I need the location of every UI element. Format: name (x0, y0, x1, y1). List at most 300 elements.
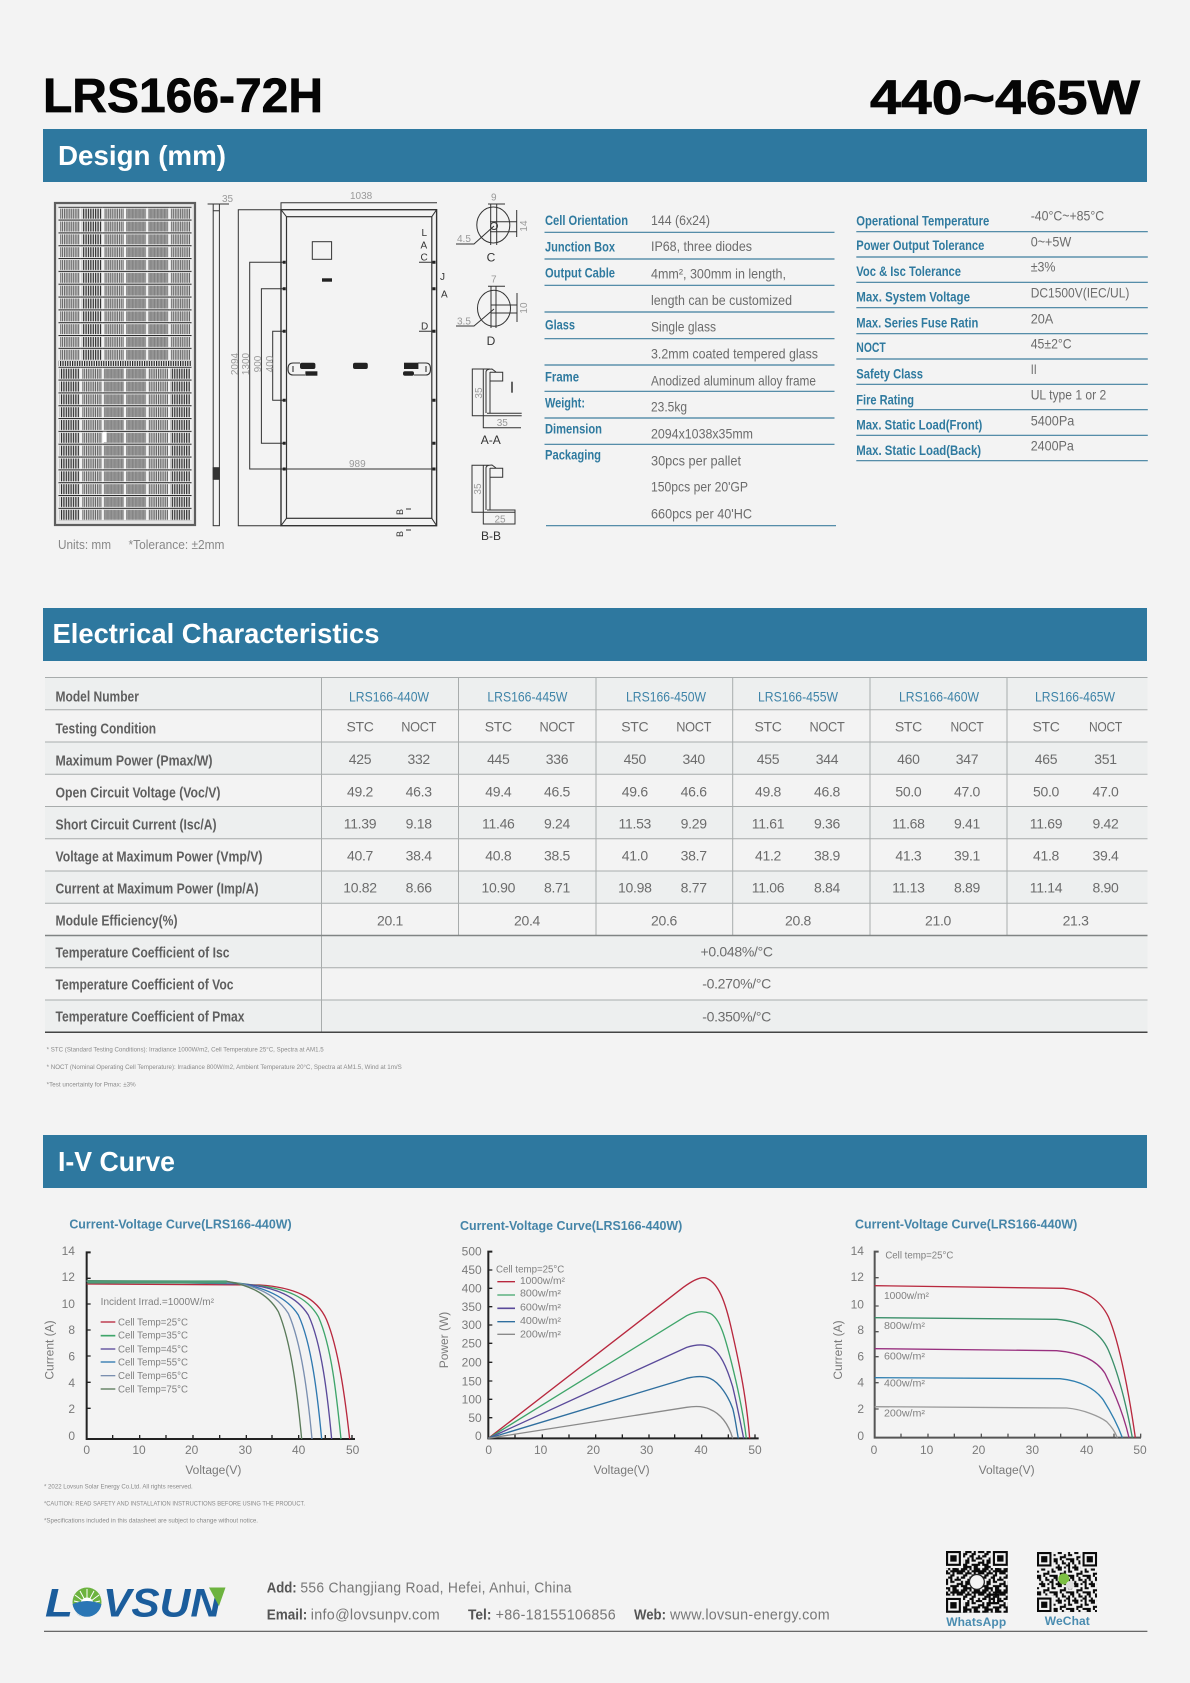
row: short circuit current: 9.24 (544, 816, 571, 832)
row: voltage at maximum power: 41.0 (622, 848, 648, 864)
row: maximum power: 445 (487, 751, 510, 767)
row: temperature coefficient of Isc: +0.048%/°C (700, 944, 773, 960)
row: open circuit voltage: 49.6 (622, 784, 648, 800)
spec table: operating ratings: Fire Rating (856, 391, 914, 407)
QR code: WeChat (1037, 1552, 1097, 1628)
row: voltage at maximum power: 38.4 (406, 848, 432, 864)
axes and ticks: 10 (920, 1443, 934, 1457)
axes and ticks: 0 (475, 1429, 482, 1443)
row: short circuit current: 9.41 (954, 816, 981, 832)
legend: 1000w/m² (520, 1276, 566, 1287)
row: temperature coefficient of Isc: Temperature Coefficient of Isc (56, 946, 230, 962)
axes and ticks: 450 (462, 1263, 482, 1277)
footnotes: legal notices: *Specifications included in this datasheet are subject to change without notice. (44, 1519, 258, 1525)
row: open circuit voltage: 46.6 (681, 784, 707, 800)
section header: electrical characteristics: Electrical Characteristics (52, 618, 380, 649)
detail: section D: 3.5 (457, 316, 471, 327)
row: current at maximum power: 8.89 (954, 880, 981, 896)
legend: 800w/m² (884, 1321, 926, 1332)
axes and ticks: 30 (640, 1443, 654, 1457)
axes and ticks: 8 (857, 1323, 864, 1337)
footnotes: legal notices: *CAUTION: READ SAFETY AND INSTALLATION INSTRUCTIONS BEFORE USING THE PRODUCT. (44, 1502, 305, 1508)
detail: section C: 14 (519, 220, 530, 232)
note: units and tolerance: Units: mm (58, 537, 111, 552)
dimension labels (230, 191, 448, 537)
axes and ticks: 150 (462, 1374, 482, 1388)
detail: section C (456, 193, 530, 265)
detail: section B-B: 35 (473, 483, 484, 495)
row: module efficiency: 21.3 (1063, 913, 1089, 929)
axes and ticks: 20 (587, 1443, 600, 1457)
axes and ticks: 300 (462, 1318, 482, 1332)
row: open circuit voltage: 50.0 (1033, 784, 1060, 800)
row: temperature coefficient of Isc (56, 944, 773, 962)
spec table: module construction: 3.2mm coated tempered glass (651, 345, 818, 361)
spec table: operating ratings: Max. Static Load(Back) (856, 442, 981, 458)
axes and ticks: 2 (68, 1402, 75, 1416)
dimension labels: C (420, 253, 428, 264)
spec table: module construction: Cell Orientation (545, 212, 628, 228)
icon: sun emblem (72, 1586, 102, 1618)
spec table: module construction: Glass (545, 316, 575, 332)
row: testing condition: NOCT (401, 719, 437, 735)
row: temperature coefficient of Pmax (56, 1009, 771, 1026)
legend: Cell Temp=55°C (118, 1357, 188, 1368)
row: open circuit voltage: 47.0 (1092, 784, 1119, 800)
axes and ticks: 20 (972, 1443, 986, 1457)
legend: Cell temp=25°C (885, 1251, 953, 1262)
dimension labels: 400 (265, 355, 276, 372)
contact details: info@lovsunpv.com (311, 1606, 440, 1623)
QR code: WhatsApp: WhatsApp (946, 1615, 1006, 1629)
row: model number: LRS166-460W (899, 689, 980, 705)
curves (875, 1286, 1135, 1438)
row: module efficiency: 20.4 (514, 913, 541, 929)
dimension labels: A (420, 240, 428, 251)
axes and ticks: 12 (62, 1270, 75, 1284)
spec table: operating ratings: 0~+5W (1031, 234, 1072, 250)
axes and ticks: 50 (468, 1411, 482, 1425)
legend: 600w/m² (884, 1351, 926, 1362)
row: testing condition: NOCT (1089, 719, 1123, 735)
note: units and tolerance (58, 537, 224, 552)
axes and ticks: 50 (346, 1443, 360, 1457)
section header: I-V curve (43, 1135, 1147, 1188)
spec table: operating ratings: 20A (1031, 310, 1054, 326)
spec table: module construction: Anodized aluminum alloy frame (651, 372, 816, 388)
axes and ticks (42, 1244, 360, 1477)
spec table: operating ratings: Max. Static Load(Front) (856, 416, 982, 432)
spec table: module construction: Weight: (545, 394, 585, 410)
row: current at maximum power: 10.82 (343, 880, 377, 896)
row: model number: LRS166-465W (1035, 689, 1116, 705)
section header: design: Design (mm) (58, 140, 226, 171)
legend (496, 1265, 566, 1340)
row: testing condition: STC (346, 719, 374, 735)
row: open circuit voltage: 46.5 (544, 784, 571, 800)
row: open circuit voltage: 49.4 (485, 784, 512, 800)
row: current at maximum power: 11.14 (1030, 880, 1063, 896)
row: module efficiency: 20.8 (785, 913, 812, 929)
axes and ticks: 0 (871, 1443, 878, 1457)
section header: design (43, 129, 1147, 182)
contact details: +86-18155106856 (496, 1606, 616, 1623)
axes and ticks: 0 (857, 1429, 864, 1443)
panel: back view of module (230, 191, 448, 537)
spec table: operating ratings: Voc & Isc Tolerance (856, 263, 961, 279)
row: open circuit voltage (56, 784, 1119, 802)
legend: Cell Temp=75°C (118, 1384, 188, 1395)
row: open circuit voltage: 49.8 (755, 784, 782, 800)
row: voltage at maximum power: 39.4 (1092, 848, 1119, 864)
row: short circuit current: 9.42 (1092, 816, 1119, 832)
contact details: 556 Changjiang Road, Hefei, Anhui, China (300, 1579, 572, 1596)
axes and ticks: 0 (68, 1429, 75, 1443)
footnotes: test conditions: * STC (Standard Testing Conditions): Irradiance 1000W/m2, Cell Temperature 25°C, Spectra at AM1.5 (47, 1048, 324, 1054)
axes and ticks: 40 (694, 1443, 708, 1457)
contact details: Tel: (468, 1606, 491, 1623)
row: model number: LRS166-455W (758, 689, 839, 705)
detail: section B-B: B-B (481, 529, 501, 543)
row: maximum power: 344 (816, 751, 839, 767)
contact details: Email: (267, 1606, 307, 1623)
panel: front view of module (55, 203, 195, 525)
axes and ticks: 0 (485, 1443, 492, 1457)
contact details (267, 1579, 830, 1623)
detail: section C: 9 (491, 193, 497, 204)
dimension labels: 1300 (241, 352, 252, 375)
row: model number: LRS166-445W (487, 689, 568, 705)
axes and ticks: Voltage(V) (979, 1463, 1035, 1477)
axes and ticks: 0 (83, 1443, 90, 1457)
row: testing condition: NOCT (810, 719, 845, 735)
axes and ticks: 10 (62, 1297, 75, 1311)
spec table: module construction (544, 212, 836, 526)
logo: Lovsun: L (45, 1582, 73, 1626)
dimension labels: A (441, 289, 448, 300)
legend (101, 1297, 215, 1395)
spec table: module construction: Frame (545, 368, 579, 384)
row: temperature coefficient of Voc: -0.270%/°C (702, 975, 771, 991)
spec table: operating ratings: Power Output Tolerance (856, 237, 984, 253)
axes and ticks: 4 (857, 1376, 864, 1390)
dimension labels: B (395, 531, 405, 537)
row: testing condition: STC (1032, 719, 1060, 735)
spec table: module construction: Packaging (545, 446, 601, 462)
row: voltage at maximum power: 41.8 (1033, 848, 1060, 864)
row: maximum power: 460 (897, 751, 920, 767)
contact details: Web: (634, 1606, 666, 1623)
spec table: module construction: Junction Box (545, 238, 615, 254)
spec table: operating ratings: Safety Class (856, 365, 923, 381)
row: current at maximum power: 10.98 (618, 880, 652, 896)
row: current at maximum power: 8.90 (1092, 880, 1119, 896)
detail: section A-A: 35 (474, 387, 485, 399)
legend: 400w/m² (884, 1379, 926, 1390)
axes and ticks: 14 (62, 1244, 75, 1258)
spec table: module construction: Dimension (545, 420, 602, 436)
frame outline (281, 210, 437, 526)
axes and ticks: Voltage(V) (185, 1463, 241, 1477)
legend: 200w/m² (884, 1409, 926, 1420)
logo: Lovsun: O (72, 1582, 102, 1626)
row: short circuit current: 11.53 (619, 816, 652, 832)
row: testing condition: STC (895, 719, 922, 735)
axes and ticks: 350 (462, 1300, 482, 1314)
detail: section C: 4.5 (457, 234, 471, 245)
dimension labels: D (421, 321, 428, 332)
row: voltage at maximum power: 38.7 (681, 848, 707, 864)
row: maximum power: 340 (682, 751, 705, 767)
axes and ticks: 10 (534, 1443, 548, 1457)
row: maximum power: 351 (1094, 751, 1117, 767)
chart: power-voltage curve by irradiance (437, 1218, 762, 1477)
spec table: operating ratings: ±3% (1031, 258, 1056, 274)
dimension labels: 1038 (350, 191, 373, 202)
axes and ticks: 6 (857, 1350, 864, 1364)
footnotes: test conditions: *Test uncertainty for Pmax: ±3% (47, 1083, 136, 1089)
axes and ticks: 40 (1080, 1443, 1094, 1457)
contact details: Add: (267, 1579, 297, 1596)
spec table: module construction: Single glass (651, 319, 716, 335)
row: current at maximum power: 8.84 (814, 880, 841, 896)
axes and ticks: 20 (185, 1443, 199, 1457)
row: testing condition (56, 719, 1123, 737)
row: voltage at maximum power: 38.5 (544, 848, 571, 864)
contact details: www.lovsun-energy.com (669, 1606, 830, 1623)
logo: Lovsun: VSUN (103, 1582, 222, 1626)
row: maximum power: 450 (624, 751, 647, 767)
spec table: operating ratings: Max. Series Fuse Ratin (856, 314, 978, 330)
spec table: operating ratings: 5400Pa (1031, 412, 1074, 428)
legend: Incident Irrad.=1000W/m² (101, 1297, 215, 1308)
row: maximum power: 332 (407, 751, 430, 767)
dimension labels: J (440, 272, 445, 283)
QR code: WhatsApp (946, 1551, 1008, 1629)
spec table: operating ratings: -40°C~+85°C (1031, 208, 1104, 224)
row: current at maximum power: 10.90 (482, 880, 516, 896)
spec table: operating ratings: 2400Pa (1031, 437, 1074, 453)
row: testing condition: STC (621, 719, 649, 735)
axes and ticks: 10 (851, 1297, 864, 1311)
row: open circuit voltage: 49.2 (347, 784, 374, 800)
row: open circuit voltage: Open Circuit Voltage (Voc/V) (56, 786, 221, 802)
legend: Cell Temp=45°C (118, 1344, 188, 1355)
spec table: operating ratings: 45±2°C (1031, 335, 1072, 351)
chart: I-V curve by cell temperature: Current-Voltage Curve(LRS166-440W) (69, 1216, 292, 1231)
row: voltage at maximum power: Voltage at Maximum Power (Vmp/V) (56, 850, 263, 866)
row: testing condition: NOCT (950, 719, 984, 735)
row: maximum power: Maximum Power (Pmax/W) (56, 754, 213, 770)
legend: 600w/m² (520, 1303, 562, 1314)
row: voltage at maximum power: 38.9 (814, 848, 841, 864)
footer rule (44, 1630, 1147, 1632)
row: maximum power (56, 751, 1117, 770)
axes and ticks: 30 (1026, 1443, 1039, 1457)
row: current at maximum power: 8.71 (544, 880, 571, 896)
dimension labels: 989 (349, 459, 366, 470)
detail: section D: 10 (519, 302, 530, 314)
chart: I-V curve by cell temperature (42, 1216, 360, 1477)
row: temperature coefficient of Voc: Temperature Coefficient of Voc (56, 978, 234, 994)
footnotes: test conditions: * NOCT (Nominal Operating Cell Temperature): Irradiance 800W/m2, Ambient Temperature 20°C, Spectra at AM1.5, Wind at 1m/S (47, 1065, 402, 1071)
row: short circuit current: 9.18 (406, 816, 432, 832)
legend: 800w/m² (520, 1289, 562, 1300)
detail: section B-B: 25 (494, 515, 506, 526)
chart: I-V curve by irradiance (831, 1216, 1147, 1477)
axes and ticks: Current (A) (42, 1320, 56, 1380)
row: voltage at maximum power: 39.1 (954, 848, 981, 864)
row: temperature coefficient of Pmax: -0.350%/°C (702, 1009, 771, 1025)
axes and ticks: 8 (68, 1323, 75, 1337)
curves (87, 1281, 350, 1439)
detail: section A-A: A-A (481, 433, 501, 447)
logo: Lovsun (45, 1582, 226, 1626)
axes and ticks: 12 (851, 1270, 864, 1284)
footnotes: legal notices: * 2022 Lovsun Solar Energy Co.Ltd. All rights reserved. (44, 1485, 193, 1491)
row: testing condition: NOCT (676, 719, 712, 735)
footnotes: test conditions (47, 1048, 402, 1089)
detail: section D (456, 275, 530, 348)
row: short circuit current: 11.46 (482, 816, 515, 832)
row: open circuit voltage: 46.3 (406, 784, 432, 800)
row: module efficiency: 20.6 (651, 913, 678, 929)
legend: 1000w/m² (884, 1291, 930, 1302)
curves (488, 1278, 750, 1438)
spec table: module construction: 23.5kg (651, 399, 687, 415)
dimension lines (238, 203, 437, 526)
spec table: module construction: 2094x1038x35mm (651, 425, 753, 441)
table: electrical characteristics (45, 678, 1148, 1032)
axes and ticks: 200 (462, 1355, 482, 1369)
row: open circuit voltage: 46.8 (814, 784, 841, 800)
row: module efficiency: 21.0 (925, 913, 952, 929)
row: current at maximum power (56, 880, 1119, 898)
row: maximum power: 465 (1035, 751, 1058, 767)
spec table: module construction: 150pcs per 20'GP (651, 478, 748, 494)
panel: side view of module: 35 (222, 194, 234, 205)
row: maximum power: 425 (349, 751, 372, 767)
row: current at maximum power: 11.13 (892, 880, 925, 896)
row: short circuit current: Short Circuit Current (Isc/A) (56, 818, 217, 834)
row: model number (56, 689, 1116, 706)
section header: I-V curve: I-V Curve (58, 1146, 175, 1177)
row: testing condition: STC (485, 719, 512, 735)
row: current at maximum power: 8.77 (681, 880, 707, 896)
spec table: module construction: IP68, three diodes (651, 238, 752, 254)
axes and ticks: 4 (68, 1376, 75, 1390)
row: model number: LRS166-440W (349, 689, 430, 705)
row: voltage at maximum power: 40.8 (485, 848, 512, 864)
row: model number: LRS166-450W (626, 689, 707, 705)
row: module efficiency: 20.1 (377, 913, 404, 929)
detail: section A-A (472, 369, 522, 447)
row: short circuit current: 11.39 (344, 816, 377, 832)
axes and ticks: 250 (462, 1337, 482, 1351)
row: voltage at maximum power: 41.2 (755, 848, 782, 864)
detail: section C: C (487, 251, 496, 265)
row: model number: Model Number (56, 690, 139, 706)
axes and ticks (831, 1244, 1147, 1477)
chart: power-voltage curve by irradiance: Current-Voltage Curve(LRS166-440W) (460, 1218, 682, 1233)
spec table: module construction: 660pcs per 40'HC (651, 505, 752, 521)
row: current at maximum power: 11.06 (752, 880, 785, 896)
axes and ticks: 30 (239, 1443, 252, 1457)
spec table: module construction: length can be customized (651, 292, 792, 308)
footnotes: legal notices (44, 1485, 305, 1525)
axes and ticks: Current (A) (831, 1320, 845, 1380)
dimension labels: B (395, 509, 405, 515)
row: module efficiency (56, 913, 1089, 930)
spec table: operating ratings: II (1031, 361, 1037, 377)
spec table: module construction: 144 (6x24) (651, 212, 710, 228)
row: short circuit current: 11.68 (892, 816, 925, 832)
axes and ticks: 400 (462, 1282, 482, 1296)
spec table: operating ratings: NOCT (856, 339, 886, 355)
row: open circuit voltage: 50.0 (895, 784, 922, 800)
legend: Cell Temp=25°C (118, 1317, 188, 1328)
legend: Cell temp=25°C (496, 1265, 564, 1276)
row: voltage at maximum power (56, 848, 1119, 866)
title: model name: LRS166-72H (43, 70, 323, 123)
axes and ticks: 40 (292, 1443, 306, 1457)
spec table: module construction: 30pcs per pallet (651, 452, 741, 468)
note: units and tolerance: *Tolerance: ±2mm (128, 537, 224, 552)
row: current at maximum power: Current at Maximum Power (Imp/A) (56, 882, 259, 898)
junction box and connectors (288, 242, 430, 376)
axes and ticks: Voltage(V) (594, 1463, 650, 1477)
spec table: operating ratings: Max. System Voltage (856, 288, 970, 304)
detail: section D: 7 (491, 275, 497, 286)
axes and ticks: 6 (68, 1350, 75, 1364)
axes and ticks: 14 (851, 1244, 864, 1258)
axes and ticks: 10 (132, 1443, 146, 1457)
row: short circuit current: 9.36 (814, 816, 841, 832)
axes and ticks: 100 (462, 1393, 482, 1407)
axes and ticks: 50 (748, 1443, 762, 1457)
row: short circuit current (56, 816, 1119, 834)
axes and ticks: Power (W) (437, 1312, 451, 1368)
axes and ticks: 2 (857, 1402, 864, 1416)
legend: Cell Temp=35°C (118, 1330, 188, 1341)
legend: Cell Temp=65°C (118, 1371, 188, 1382)
row: open circuit voltage: 47.0 (954, 784, 981, 800)
row: maximum power: 455 (757, 751, 780, 767)
legend: 200w/m² (520, 1329, 562, 1340)
row: short circuit current: 11.69 (1030, 816, 1063, 832)
row: maximum power: 336 (546, 751, 569, 767)
row: testing condition: Testing Condition (56, 721, 156, 737)
panel: side view of module (208, 194, 234, 526)
row: temperature coefficient of Pmax: Temperature Coefficient of Pmax (56, 1010, 244, 1026)
row: testing condition: STC (754, 719, 782, 735)
title: power range: 440~465W (870, 72, 1141, 125)
spec table: operating ratings: DC1500V(IEC/UL) (1031, 285, 1129, 301)
row: current at maximum power: 8.66 (406, 880, 432, 896)
row: short circuit current: 9.29 (681, 816, 707, 832)
row: voltage at maximum power: 41.3 (895, 848, 922, 864)
spec table: module construction: Output Cable (545, 264, 615, 280)
row: maximum power: 347 (956, 751, 979, 767)
spec table: operating ratings (856, 208, 1148, 461)
chart: I-V curve by irradiance: Current-Voltage Curve(LRS166-440W) (855, 1216, 1077, 1231)
detail: section A-A: 35 (497, 418, 508, 429)
spec table: module construction: 4mm², 300mm in length, (651, 265, 786, 281)
row: voltage at maximum power: 40.7 (347, 848, 374, 864)
row: temperature coefficient of Voc (56, 975, 771, 994)
row: module efficiency: Module Efficiency(%) (56, 914, 178, 930)
row: short circuit current: 11.61 (752, 816, 785, 832)
